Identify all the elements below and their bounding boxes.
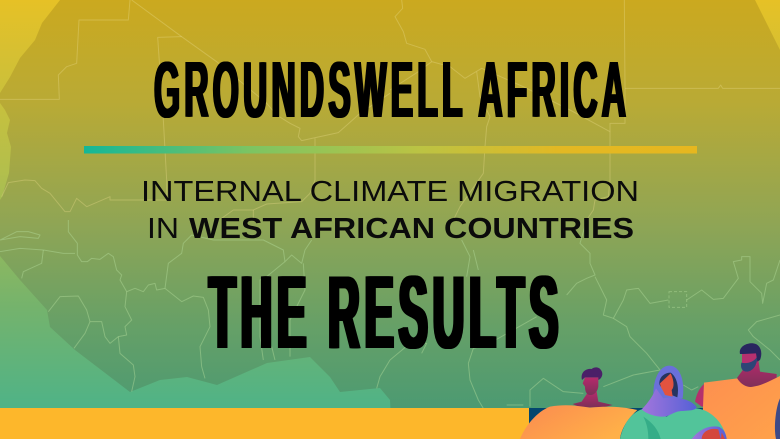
map: country borders xyxy=(0,0,780,220)
person: right man xyxy=(695,343,780,439)
subtitle line 1: INTERNAL CLIMATE MIGRATION xyxy=(141,176,639,208)
heading: the results: THE RESULTS xyxy=(209,255,563,371)
bottom band: yellow xyxy=(0,408,529,439)
person: left man xyxy=(520,367,637,439)
subtitle line 2: IN xyxy=(147,213,179,245)
title: GROUNDSWELL AFRICA xyxy=(154,45,630,134)
person: woman with child xyxy=(620,366,727,439)
illustration: three people xyxy=(520,343,780,439)
bottom band: navy xyxy=(529,408,780,439)
subtitle line 2: WEST AFRICAN COUNTRIES xyxy=(189,213,634,245)
gradient divider bar xyxy=(84,146,697,154)
